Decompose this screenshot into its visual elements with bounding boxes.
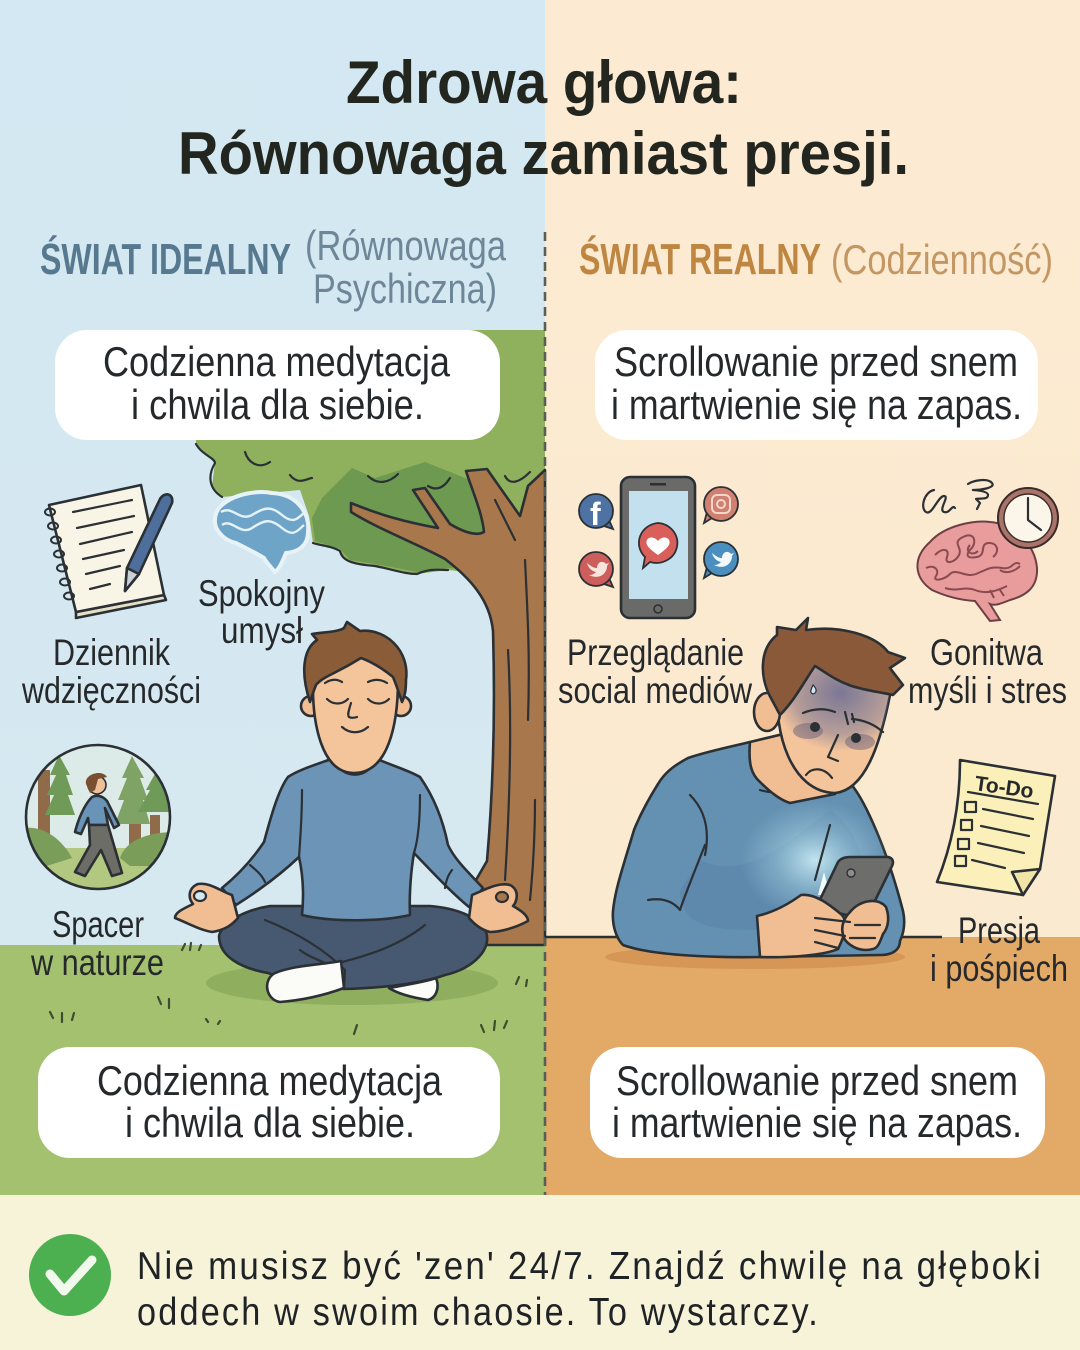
icon: green check xyxy=(29,1234,111,1316)
callout: ideal bottom: Codzienna medytacja xyxy=(97,1057,443,1104)
callout: ideal top: i chwila dla siebie. xyxy=(131,381,424,428)
worried face details xyxy=(803,709,883,778)
label: social media xyxy=(558,632,752,711)
label: racing thoughts: Gonitwa xyxy=(930,632,1043,673)
tree trunk xyxy=(351,469,545,945)
icon: to-do list: To-Do xyxy=(973,772,1035,803)
label: pressure and rush xyxy=(930,910,1068,989)
icon: calm brain xyxy=(215,492,308,572)
heart bubble xyxy=(639,523,677,568)
label: social media: Przeglądanie xyxy=(567,632,744,673)
hands xyxy=(175,884,238,932)
table surface xyxy=(545,937,1080,1195)
label: social media: social mediów xyxy=(558,670,752,711)
illustration: stressed person xyxy=(545,618,942,969)
callout: real bottom xyxy=(590,1047,1045,1158)
bird bubble blue xyxy=(704,542,738,578)
heading: ideal world: Psychiczna) xyxy=(313,265,497,312)
closed eyes and smile xyxy=(325,680,389,732)
callout: real top: Scrollowanie przed snem xyxy=(614,338,1018,385)
title: Zdrowa głowa: xyxy=(346,49,742,116)
heading: real world xyxy=(579,234,1053,284)
face xyxy=(313,650,398,773)
title: Równowaga zamiast presji. xyxy=(178,120,909,187)
hair xyxy=(304,622,406,702)
label: racing thoughts xyxy=(908,632,1067,711)
footer message xyxy=(137,1245,1043,1334)
panel: ideal world background xyxy=(0,0,545,1195)
divider xyxy=(544,232,546,1195)
label: gratitude journal: Dziennik xyxy=(53,632,170,673)
instagram bubble xyxy=(704,487,738,523)
grass tufts xyxy=(50,943,527,1034)
neck xyxy=(334,740,375,774)
label: calm mind xyxy=(198,573,325,651)
facebook bubble xyxy=(579,494,613,529)
callout: real top xyxy=(595,330,1038,440)
footer message: oddech w swoim chaosie. To wystarczy. xyxy=(137,1291,820,1334)
face xyxy=(777,655,890,793)
phone xyxy=(816,857,893,918)
hair xyxy=(763,618,905,715)
legs xyxy=(219,906,487,989)
label: walk in nature: w naturze xyxy=(30,942,164,983)
icon: to-do list xyxy=(937,760,1055,895)
socks xyxy=(267,961,344,1002)
callout: ideal top: Codzienna medytacja xyxy=(103,338,451,385)
ears xyxy=(301,696,321,716)
tree canopy xyxy=(196,330,545,575)
callout: ideal top xyxy=(55,330,500,440)
panel: real world background xyxy=(545,0,1080,1195)
callout: real bottom: Scrollowanie przed snem xyxy=(616,1057,1018,1104)
illustration: meditating person xyxy=(175,622,528,1002)
sweater xyxy=(222,758,483,920)
callout: ideal bottom xyxy=(38,1047,500,1158)
icon: gratitude journal xyxy=(45,485,172,618)
icon: racing brain and clock xyxy=(917,480,1058,621)
heading: ideal world: (Równowaga xyxy=(305,222,507,269)
label: gratitude journal: wdzięczności xyxy=(21,670,201,711)
panel: footer background xyxy=(0,1195,1080,1350)
callout: ideal bottom: i chwila dla siebie. xyxy=(125,1099,415,1146)
neck xyxy=(749,730,835,803)
label: walk in nature xyxy=(30,904,164,983)
icon: phone with social media: f xyxy=(590,496,601,532)
hands xyxy=(757,895,845,957)
callout: real top: i martwienie się na zapas. xyxy=(611,381,1022,428)
ear xyxy=(754,693,780,731)
heading: ideal world: ŚWIAT IDEALNY xyxy=(40,234,291,284)
icon: walk in nature xyxy=(25,744,175,893)
heading: ideal world xyxy=(40,222,507,312)
label: walk in nature: Spacer xyxy=(52,904,144,945)
heading: real world: ŚWIAT REALNY xyxy=(579,234,821,284)
illustration: tree xyxy=(196,330,545,945)
title xyxy=(178,49,909,187)
sweater xyxy=(613,742,904,957)
label: calm mind: Spokojny xyxy=(198,573,325,614)
icon: phone with social media xyxy=(579,477,738,618)
bird bubble red xyxy=(579,552,613,587)
label: pressure and rush: Presja xyxy=(958,910,1040,951)
label: gratitude journal xyxy=(21,632,201,711)
label: calm mind: umysł xyxy=(221,610,303,651)
grass ground xyxy=(0,945,545,1195)
table line xyxy=(545,936,942,938)
